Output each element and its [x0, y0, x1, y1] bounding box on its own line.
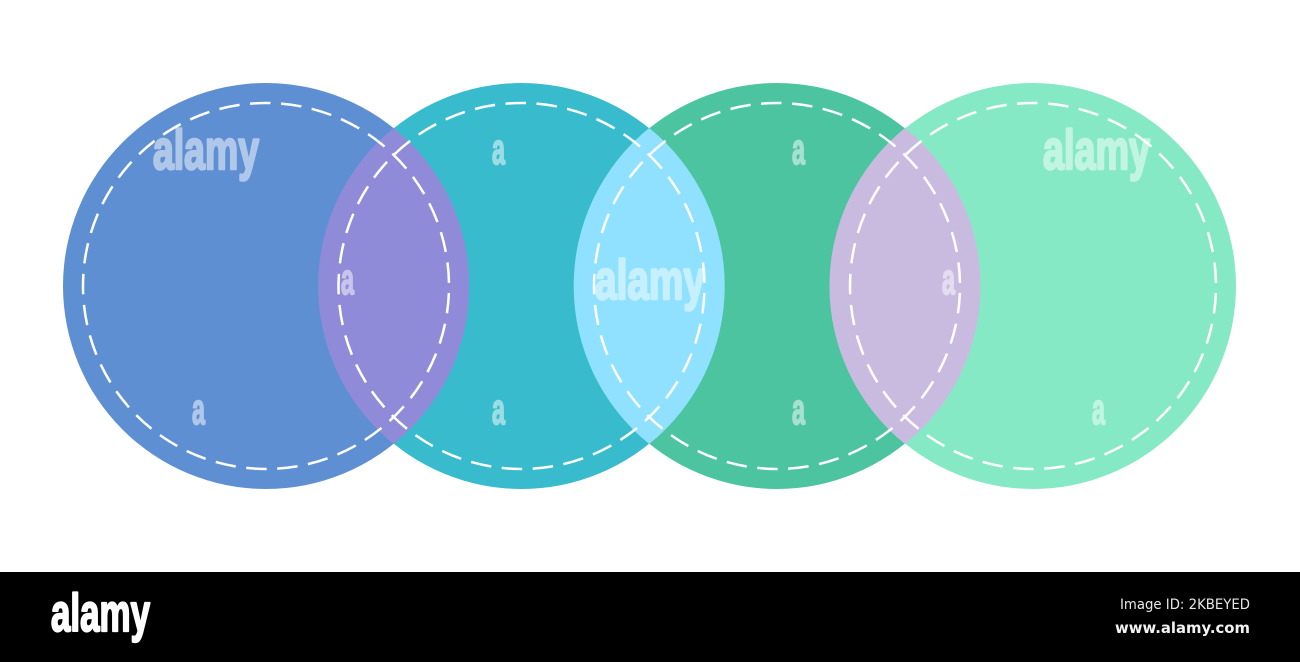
circle 2: teal: [318, 83, 724, 489]
small watermark letters: a: [792, 125, 805, 174]
website: www.alamy.com: [1115, 619, 1250, 637]
circle 1: blue: [63, 83, 469, 489]
image id: Image ID: 2KBEYED: [1120, 597, 1250, 613]
small watermark letters: a: [192, 385, 205, 434]
watermark: centre: alamy: [595, 248, 705, 311]
small watermark letters: a: [492, 385, 505, 434]
circle 3: green: [574, 83, 980, 489]
circle 4: mint: [830, 83, 1236, 489]
overlap: purple lens: [318, 128, 469, 444]
watermark: top right: alamy: [1043, 118, 1150, 181]
small watermark letters: [192, 125, 1105, 434]
small watermark letters: a: [341, 255, 354, 304]
watermarks over the circles: [153, 118, 1150, 434]
overlap: light blue lens: [574, 128, 725, 444]
small watermark letters: a: [492, 125, 505, 174]
dashed ring 3: [594, 103, 960, 469]
watermark: top left: alamy: [153, 118, 259, 181]
diagram: four overlapping circles: [63, 83, 1236, 489]
small watermark letters: a: [1092, 385, 1105, 434]
small watermark letters: a: [792, 385, 805, 434]
footer bar: [0, 572, 1300, 662]
overlap: lilac lens: [829, 128, 981, 444]
dashed ring 2: [338, 103, 704, 469]
dashed ring 1: [83, 103, 449, 469]
small watermark letters: a: [942, 255, 955, 304]
dashed ring 4: [850, 103, 1216, 469]
footer logo: alamy: [51, 584, 150, 643]
